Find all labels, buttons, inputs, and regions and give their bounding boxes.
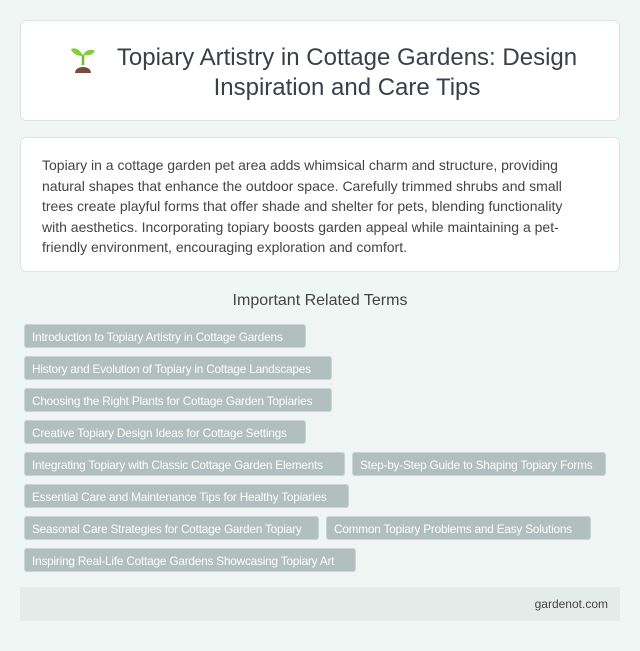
section heading: Important Related Terms <box>233 292 407 309</box>
tag 4 <box>24 420 306 444</box>
tag 8: Seasonal Care Strategies for Cottage Garden Topiary <box>32 522 302 536</box>
description text: with aesthetics. Incorporating topiary boosts garden appeal while maintaining a pet- <box>42 218 559 234</box>
header card <box>20 20 620 121</box>
tag 9 <box>326 516 591 540</box>
tag 2 <box>24 356 332 380</box>
description text: trees create playful forms that offer shade and shelter for pets, blending functionality <box>42 198 562 214</box>
tag 4: Creative Topiary Design Ideas for Cottage Settings <box>32 426 287 440</box>
footer text: gardenot.com <box>535 597 608 611</box>
title: Topiary Artistry in Cottage Gardens: Design Inspiration and Care Tips <box>117 44 577 101</box>
description text <box>42 157 562 255</box>
tag 3: Choosing the Right Plants for Cottage Garden Topiaries <box>32 394 312 408</box>
tag 6: Step-by-Step Guide to Shaping Topiary Forms <box>360 458 592 472</box>
description text: natural shapes that enhance the outdoor space. Carefully trimmed shrubs and small <box>42 178 562 194</box>
tag 3 <box>24 388 332 412</box>
tag 9: Common Topiary Problems and Easy Solutions <box>334 522 572 536</box>
tag 7: Essential Care and Maintenance Tips for Healthy Topiaries <box>32 490 327 504</box>
tag 6 <box>352 452 606 476</box>
tag 1 <box>24 324 306 348</box>
tag 10: Inspiring Real-Life Cottage Gardens Showcasing Topiary Art <box>32 554 334 568</box>
description text: friendly environment, encouraging exploration and comfort. <box>42 239 407 255</box>
tag 10 <box>24 548 356 572</box>
description card <box>20 137 620 272</box>
tag 8 <box>24 516 319 540</box>
description text: Topiary in a cottage garden pet area adds whimsical charm and structure, providing <box>42 157 558 173</box>
icon: seedling <box>71 48 95 73</box>
tag 1: Introduction to Topiary Artistry in Cottage Gardens <box>32 330 283 344</box>
tag 2: History and Evolution of Topiary in Cottage Landscapes <box>32 362 311 376</box>
tag 7 <box>24 484 349 508</box>
tag 5: Integrating Topiary with Classic Cottage Garden Elements <box>32 458 323 472</box>
tag 5 <box>24 452 345 476</box>
footer <box>20 587 620 621</box>
